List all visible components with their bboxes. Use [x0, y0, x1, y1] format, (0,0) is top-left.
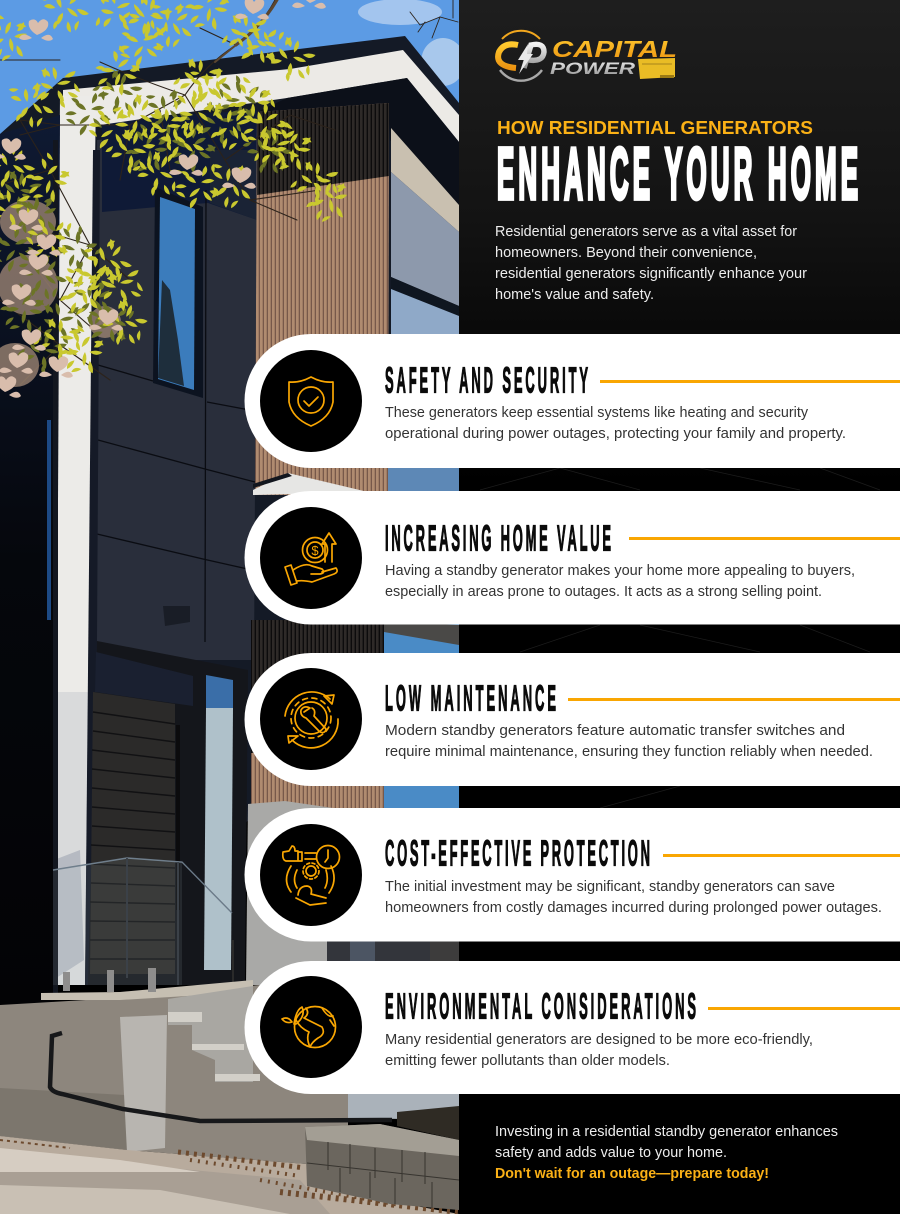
tree foliage bright layer: [0, 0, 349, 381]
logo: Capital Power: [498, 31, 677, 81]
closing call to action: Investing in a residential standby generator enhances: [495, 1124, 838, 1140]
icon: hand with coin: $: [311, 543, 319, 558]
slate panels: [92, 125, 257, 660]
panel: environmental considerations: [245, 961, 900, 1094]
panel: safety and security: [245, 334, 900, 468]
subtitle: HOW RESIDENTIAL GENERATORS: [497, 118, 813, 138]
blossom masses: [0, 200, 121, 387]
heading: LOW MAINTENANCE: [385, 679, 556, 718]
building mass: [0, 36, 459, 1010]
white soffit blocks: [253, 473, 368, 495]
intro text: home's value and safety.: [495, 287, 654, 303]
body text: Having a standby generator makes your home more appealing to buyers,: [385, 563, 855, 579]
panel: low maintenance: [245, 653, 900, 786]
intro text: homeowners. Beyond their convenience,: [495, 245, 757, 261]
intro text: Residential generators serve as a vital asset for: [495, 224, 797, 240]
body text: operational during power outages, protecting your family and property.: [385, 426, 846, 442]
sky: [0, 0, 459, 170]
main title: ENHANCE YOUR HOME: [497, 134, 858, 214]
body text: Modern standby generators feature automatic transfer switches and: [385, 723, 845, 739]
logo emblem: [498, 31, 544, 81]
intro text: residential generators significantly enhance your: [495, 266, 807, 282]
body text: [385, 723, 873, 760]
white column: [53, 96, 96, 985]
logo wordmark: CAPITAL: [552, 36, 677, 62]
icon: shield: [260, 350, 362, 452]
body text: Many residential generators are designed to be more eco-friendly,: [385, 1032, 813, 1048]
icon: hand with coin: [260, 507, 362, 609]
body text: emitting fewer pollutants than older models.: [385, 1053, 670, 1069]
heading: COST-EFFECTIVE PROTECTION: [385, 834, 650, 873]
body text: [385, 563, 855, 600]
wall at far right: [348, 1094, 459, 1120]
body text: [385, 879, 882, 916]
closing call to action: [495, 1124, 838, 1182]
upper window: [153, 187, 203, 398]
body text: [385, 405, 846, 442]
wall lamp: [163, 606, 190, 626]
steps: [168, 986, 253, 1082]
body text: require minimal maintenance, ensuring they function reliably when needed.: [385, 744, 873, 760]
door zone: [88, 641, 248, 985]
dark right panel background: [459, 0, 900, 1214]
tree branches: [0, 0, 458, 385]
panel: increasing home value: [245, 491, 900, 624]
glass railing: [53, 858, 232, 985]
body text: homeowners from costly damages incurred during prolonged power outages.: [385, 900, 882, 916]
photo: modern house exterior: [0, 0, 465, 1214]
right window lower: [384, 620, 459, 810]
icon: cost and time cycle: [260, 824, 362, 926]
logo: Capital Power: POWER: [550, 59, 636, 78]
brick planter: [305, 1124, 459, 1210]
logo generator: [638, 58, 675, 79]
wood lower: [251, 620, 384, 808]
heading: ENVIRONMENTAL CONSIDERATIONS: [385, 987, 696, 1026]
body text: These generators keep essential systems like heating and security: [385, 405, 809, 421]
tree foliage shadow layer: [0, 64, 298, 381]
heading: INCREASING HOME VALUE: [385, 519, 611, 558]
icon: globe with leaf: [260, 976, 362, 1078]
body text: The initial investment may be significant, standby generators can save: [385, 879, 835, 895]
closing call to action: Don't wait for an outage—prepare today!: [495, 1166, 769, 1182]
wood cladding: [255, 103, 389, 495]
left dark cladding: [0, 115, 60, 1005]
closing call to action: safety and adds value to your home.: [495, 1145, 727, 1161]
panel: cost-effective protection: [245, 808, 900, 942]
concrete base: [0, 985, 348, 1170]
far window band: [327, 941, 459, 961]
icon: gear and wrench: [260, 668, 362, 770]
roof fascia: [63, 50, 459, 142]
body text: especially in areas prone to outages. It acts as a strong selling point.: [385, 584, 822, 600]
pavement: [0, 1136, 459, 1214]
tree blossoms: [0, 0, 326, 398]
heading: SAFETY AND SECURITY: [385, 361, 588, 400]
window panels on the right wing: [391, 128, 459, 232]
body text: [385, 1032, 813, 1069]
pipe: [50, 1033, 392, 1121]
intro text: [495, 224, 807, 303]
